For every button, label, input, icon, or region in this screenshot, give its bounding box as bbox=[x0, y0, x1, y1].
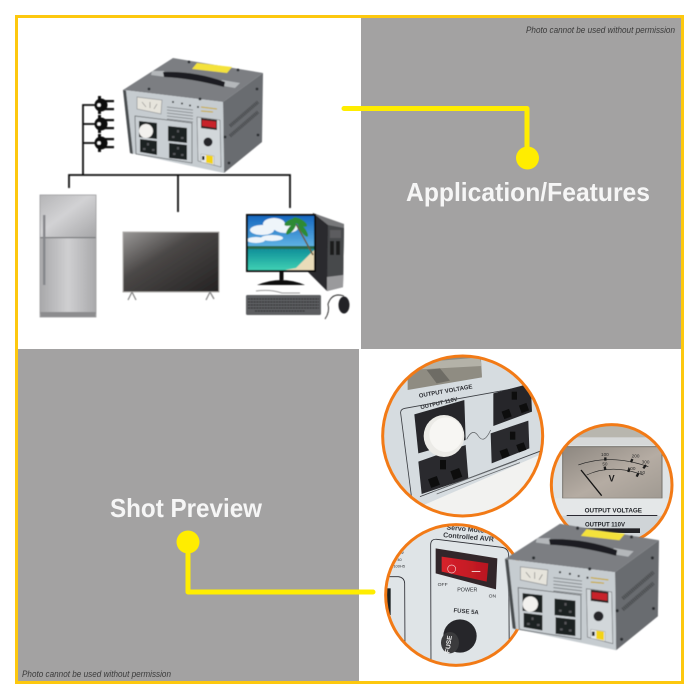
wiring lines bbox=[69, 105, 290, 212]
close-up: power switch and fuse: Servo Motor bbox=[446, 525, 488, 535]
close-up: voltmeter bbox=[550, 423, 673, 545]
panel: application/features grey bbox=[361, 18, 681, 349]
product close-ups bbox=[383, 353, 673, 670]
close-up: power switch and fuse: POWER bbox=[457, 587, 478, 593]
photo permission note top: Photo cannot be used without permission bbox=[526, 25, 675, 35]
close-up: voltmeter: OUTPUT 110V bbox=[585, 522, 625, 528]
close-up: power switch and fuse: W bbox=[400, 550, 404, 555]
close-up: power switch and fuse: FUSE 5A bbox=[453, 608, 480, 616]
close-up: power switch and fuse: 40 bbox=[397, 557, 403, 562]
close-up: power switch and fuse: ON bbox=[489, 594, 496, 600]
close-up: voltmeter: 100 bbox=[601, 452, 609, 457]
close-up: power switch and fuse: FUSE bbox=[444, 635, 454, 654]
close-up: voltmeter: OUTPUT VOLTAGE bbox=[585, 508, 642, 515]
close-up: power switch and fuse bbox=[383, 525, 526, 670]
icon: plug bottom bbox=[94, 134, 114, 152]
connector: application/features bbox=[344, 108, 539, 170]
icon: desktop computer bbox=[246, 213, 350, 319]
close-up: power switch and fuse: 100H5 bbox=[393, 563, 406, 568]
close-up: power switch and fuse: OFF bbox=[438, 582, 448, 588]
close-up: sockets bbox=[383, 353, 543, 517]
voltage regulator device bbox=[123, 58, 263, 173]
close-up: voltmeter: 50 bbox=[602, 462, 608, 467]
close-up: voltmeter: 100 bbox=[628, 466, 636, 471]
close-up: voltmeter: 300 bbox=[642, 459, 650, 464]
close-up: voltmeter: 200 bbox=[632, 454, 640, 459]
icon: plug middle bbox=[94, 115, 114, 133]
heading: application/features: Application/Features bbox=[406, 177, 650, 207]
close-up: voltmeter: V bbox=[609, 473, 615, 483]
regulator product photo bbox=[505, 524, 659, 650]
panel: shot preview grey bbox=[18, 349, 359, 681]
close-up: sockets: OUTPUT 110V bbox=[420, 397, 458, 411]
close-up: voltmeter: 150 bbox=[637, 470, 646, 475]
heading: shot preview: Shot Preview bbox=[110, 493, 263, 523]
icon: television bbox=[123, 232, 219, 300]
connector: shot preview bbox=[176, 530, 373, 592]
close-up: power switch and fuse: Controlled AVR bbox=[443, 532, 494, 544]
photo permission note bottom: Photo cannot be used without permission bbox=[22, 669, 171, 679]
icon: plug top bbox=[94, 96, 114, 114]
close-up: sockets: OUTPUT VOLTAGE bbox=[419, 384, 473, 400]
diagram: wiring, appliances and regulator bbox=[40, 58, 350, 319]
icon: refrigerator bbox=[40, 195, 96, 317]
